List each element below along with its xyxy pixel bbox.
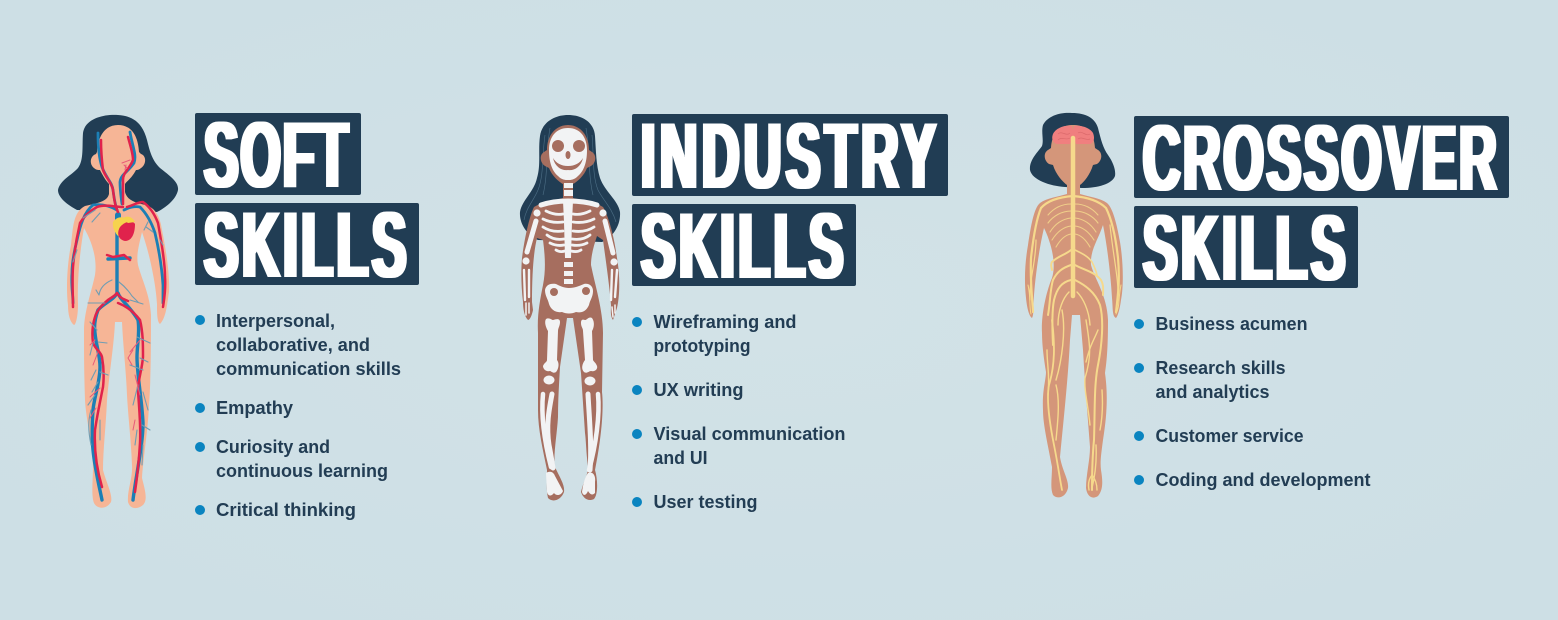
list: industry skills: and UI	[654, 448, 708, 468]
list: soft skills	[195, 311, 401, 520]
figure: circulatory system	[58, 115, 178, 508]
list: soft skills: communication skills	[216, 359, 401, 379]
list: soft skills: Empathy	[216, 398, 293, 418]
icon: brain	[1052, 126, 1094, 144]
vessels: red arteries	[73, 137, 165, 492]
list: industry skills: Visual communication	[654, 424, 846, 444]
heading: skills: SKILLS	[204, 193, 406, 298]
vessels: fine branches	[73, 210, 163, 465]
panel: soft skills	[58, 103, 419, 520]
panel: industry skills	[520, 104, 948, 512]
heading: soft: SOFT	[204, 103, 348, 208]
bones	[522, 183, 618, 496]
list: industry skills: Wireframing and	[654, 312, 796, 332]
list: industry skills	[632, 312, 846, 512]
list: industry skills: User testing	[654, 492, 758, 512]
list: soft skills: collaborative, and	[216, 335, 370, 355]
vessels: blue veins	[72, 132, 163, 500]
skull	[549, 128, 587, 180]
heading: skills: SKILLS	[1143, 196, 1345, 301]
list: industry skills: prototyping	[654, 336, 750, 356]
list: soft skills: Interpersonal,	[216, 311, 335, 331]
heading: crossover: CROSSOVER	[1143, 106, 1497, 211]
icon: heart	[113, 217, 135, 241]
list: crossover skills: and analytics	[1156, 382, 1270, 402]
list: industry skills: UX writing	[654, 380, 744, 400]
list: soft skills: Curiosity and	[216, 437, 330, 457]
list: soft skills: Critical thinking	[216, 500, 356, 520]
heading: industry: INDUSTRY	[641, 104, 936, 209]
list: crossover skills: Business acumen	[1156, 314, 1308, 334]
figure: nervous system	[1025, 113, 1123, 498]
list: crossover skills: Research skills	[1156, 358, 1286, 378]
figure: skeleton	[520, 115, 620, 500]
panel: crossover skills	[1025, 106, 1509, 498]
list: soft skills: continuous learning	[216, 461, 388, 481]
heading: skills: SKILLS	[641, 194, 843, 299]
list: crossover skills: Coding and development	[1156, 470, 1370, 490]
nerves	[1028, 138, 1121, 490]
list: crossover skills	[1134, 314, 1370, 490]
list: crossover skills: Customer service	[1156, 426, 1304, 446]
